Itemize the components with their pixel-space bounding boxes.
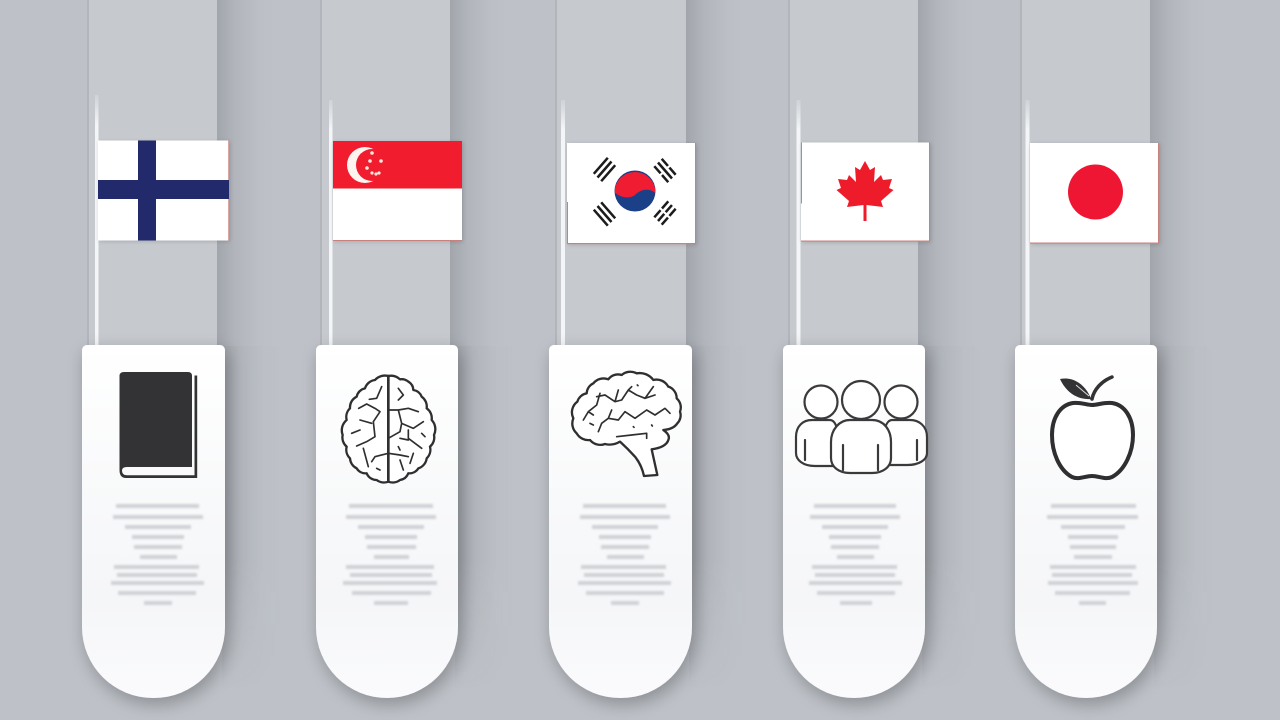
flagpole: Japan [1026, 100, 1030, 346]
icon: apple [1052, 377, 1133, 478]
taegeuk [614, 170, 656, 212]
panel: card 3 [549, 345, 692, 698]
flag: Finland [98, 140, 229, 240]
panel: background strips [87, 0, 1184, 650]
flagpole: Singapore [329, 100, 332, 346]
text block: illegible body copy [809, 506, 902, 603]
flagpole: South Korea [561, 100, 565, 346]
flagpole: Finland [95, 95, 98, 346]
icon: group of people [796, 381, 927, 473]
icon: book [120, 372, 197, 478]
text block: illegible body copy [343, 506, 437, 603]
text block: illegible body copy [1047, 506, 1138, 603]
panel: card 1 [82, 345, 225, 698]
text block: illegible body copy [578, 506, 671, 603]
trigrams [594, 158, 676, 226]
flag: Singapore [333, 141, 462, 241]
text block: illegible body copy [111, 506, 204, 603]
panel: card 2 [316, 345, 458, 698]
icon: brain top view [342, 376, 435, 482]
flag: South Korea [567, 143, 696, 244]
flag: Canada [801, 142, 930, 242]
flagpole: Canada [796, 100, 800, 346]
panel: card 4 [783, 345, 927, 698]
panel: card 5 [1015, 345, 1157, 698]
flag: Japan [1030, 143, 1159, 244]
icon: brain side view [572, 372, 681, 476]
